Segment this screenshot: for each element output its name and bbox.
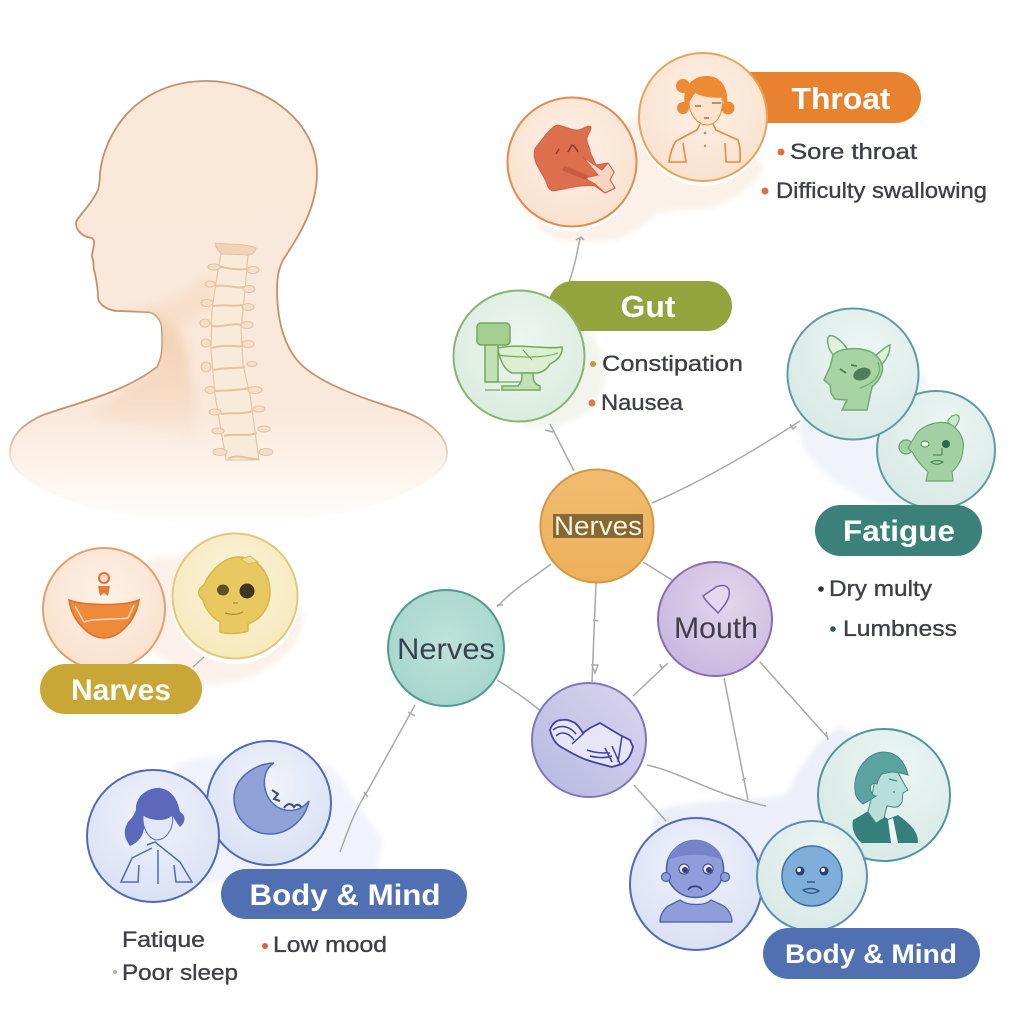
body and mind symptom list: Poor sleep	[122, 960, 238, 985]
fatigue symptom list: Dry multy	[829, 576, 932, 601]
node: nerves teal: Nerves	[397, 633, 495, 666]
narves pill: Narves	[71, 674, 171, 707]
fatigue pill	[815, 505, 982, 556]
icon circle: man with jacket	[818, 729, 950, 861]
body and mind symptom list: Low mood	[273, 932, 387, 957]
icon circle: tired woman	[87, 770, 219, 902]
node: nerves teal	[388, 590, 504, 706]
background wash: left body and mind group	[130, 755, 383, 900]
neck shadow	[98, 314, 195, 432]
gut pill	[548, 281, 732, 331]
gut symptom list: Nausea	[601, 390, 684, 415]
icon circle: yellow face	[171, 534, 299, 664]
throat symptom list	[762, 139, 987, 203]
node: mouth purple: Mouth	[674, 612, 758, 645]
icon circle: fatigue heads	[788, 308, 995, 509]
narves pill	[40, 664, 202, 714]
icon circle: mouth	[43, 548, 165, 670]
fatigue pill: Fatigue	[843, 515, 955, 548]
gut symptom list	[588, 351, 743, 415]
node: nerves orange: Nerves	[554, 511, 642, 541]
body and mind symptom list	[113, 927, 387, 985]
throat symptom list: Difficulty swallowing	[776, 178, 987, 203]
human head and neck figure	[10, 81, 447, 525]
icon circle: sad bald person	[630, 818, 762, 950]
icon circle: throat organ	[507, 98, 637, 231]
node: mouth purple	[658, 562, 772, 676]
background wash: gut group	[520, 322, 605, 428]
body and mind pill right	[763, 928, 980, 979]
icon circle: moon	[207, 741, 331, 865]
body and mind pill right: Body & Mind	[785, 939, 957, 969]
head and shoulders silhouette	[10, 81, 447, 525]
fatigue symptom list: Lumbness	[843, 616, 957, 641]
node: lavender organ	[532, 683, 646, 797]
jaw shadow	[133, 281, 213, 332]
background wash: right body and mind group	[652, 728, 900, 890]
cervical spine	[200, 243, 273, 460]
body and mind pill left	[221, 869, 467, 919]
throat symptom list: Sore throat	[790, 139, 917, 164]
gut pill: Gut	[620, 289, 676, 324]
body and mind symptom list: Fatique	[122, 927, 205, 952]
icon circle: blue face	[757, 821, 867, 931]
background wash: fatigue group	[799, 360, 960, 510]
background wash: throat group	[537, 115, 763, 242]
throat pill	[715, 72, 921, 123]
icon circle: gut toilet	[454, 290, 584, 422]
throat pill: Throat	[792, 81, 890, 116]
fatigue symptom list	[818, 576, 957, 641]
background wash: narves group	[150, 550, 303, 685]
icon circle: girl with sore throat	[639, 53, 767, 186]
gut symptom list: Constipation	[602, 351, 743, 376]
connector lines	[193, 237, 828, 852]
node: nerves orange	[540, 470, 654, 582]
body and mind pill left: Body & Mind	[250, 879, 440, 912]
